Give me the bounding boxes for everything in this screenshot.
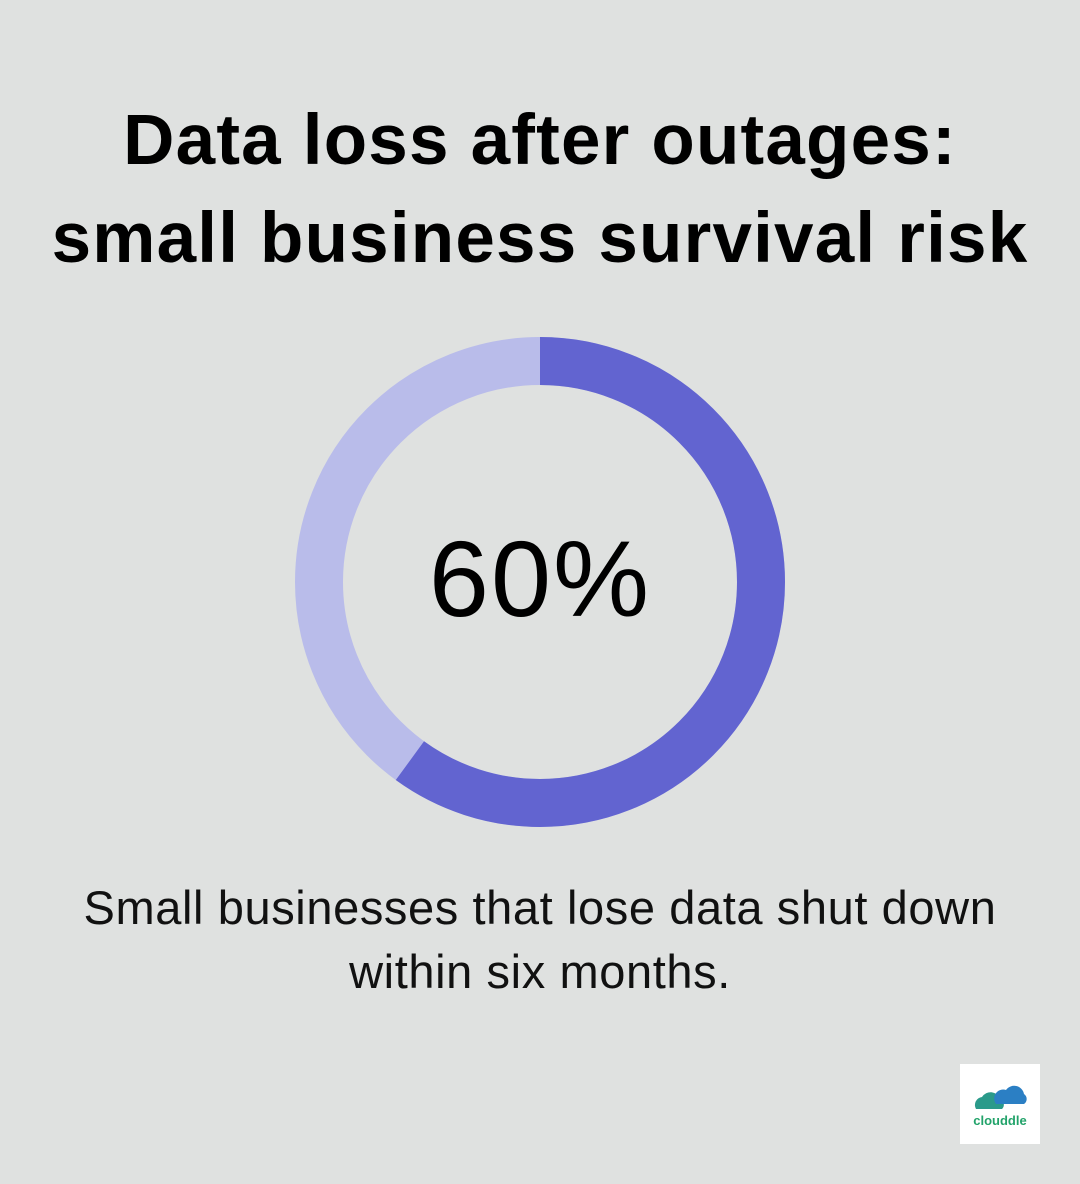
logo: clouddle: clouddle: [973, 1113, 1027, 1128]
title: Data loss after outages:: [123, 101, 957, 180]
title: [52, 101, 1028, 278]
donut chart: 60%: [429, 518, 651, 639]
logo: clouddle: [960, 1064, 1040, 1144]
caption: within six months.: [349, 945, 731, 998]
caption: [84, 881, 996, 998]
caption: Small businesses that lose data shut down: [84, 881, 996, 934]
title: small business survival risk: [52, 199, 1028, 278]
